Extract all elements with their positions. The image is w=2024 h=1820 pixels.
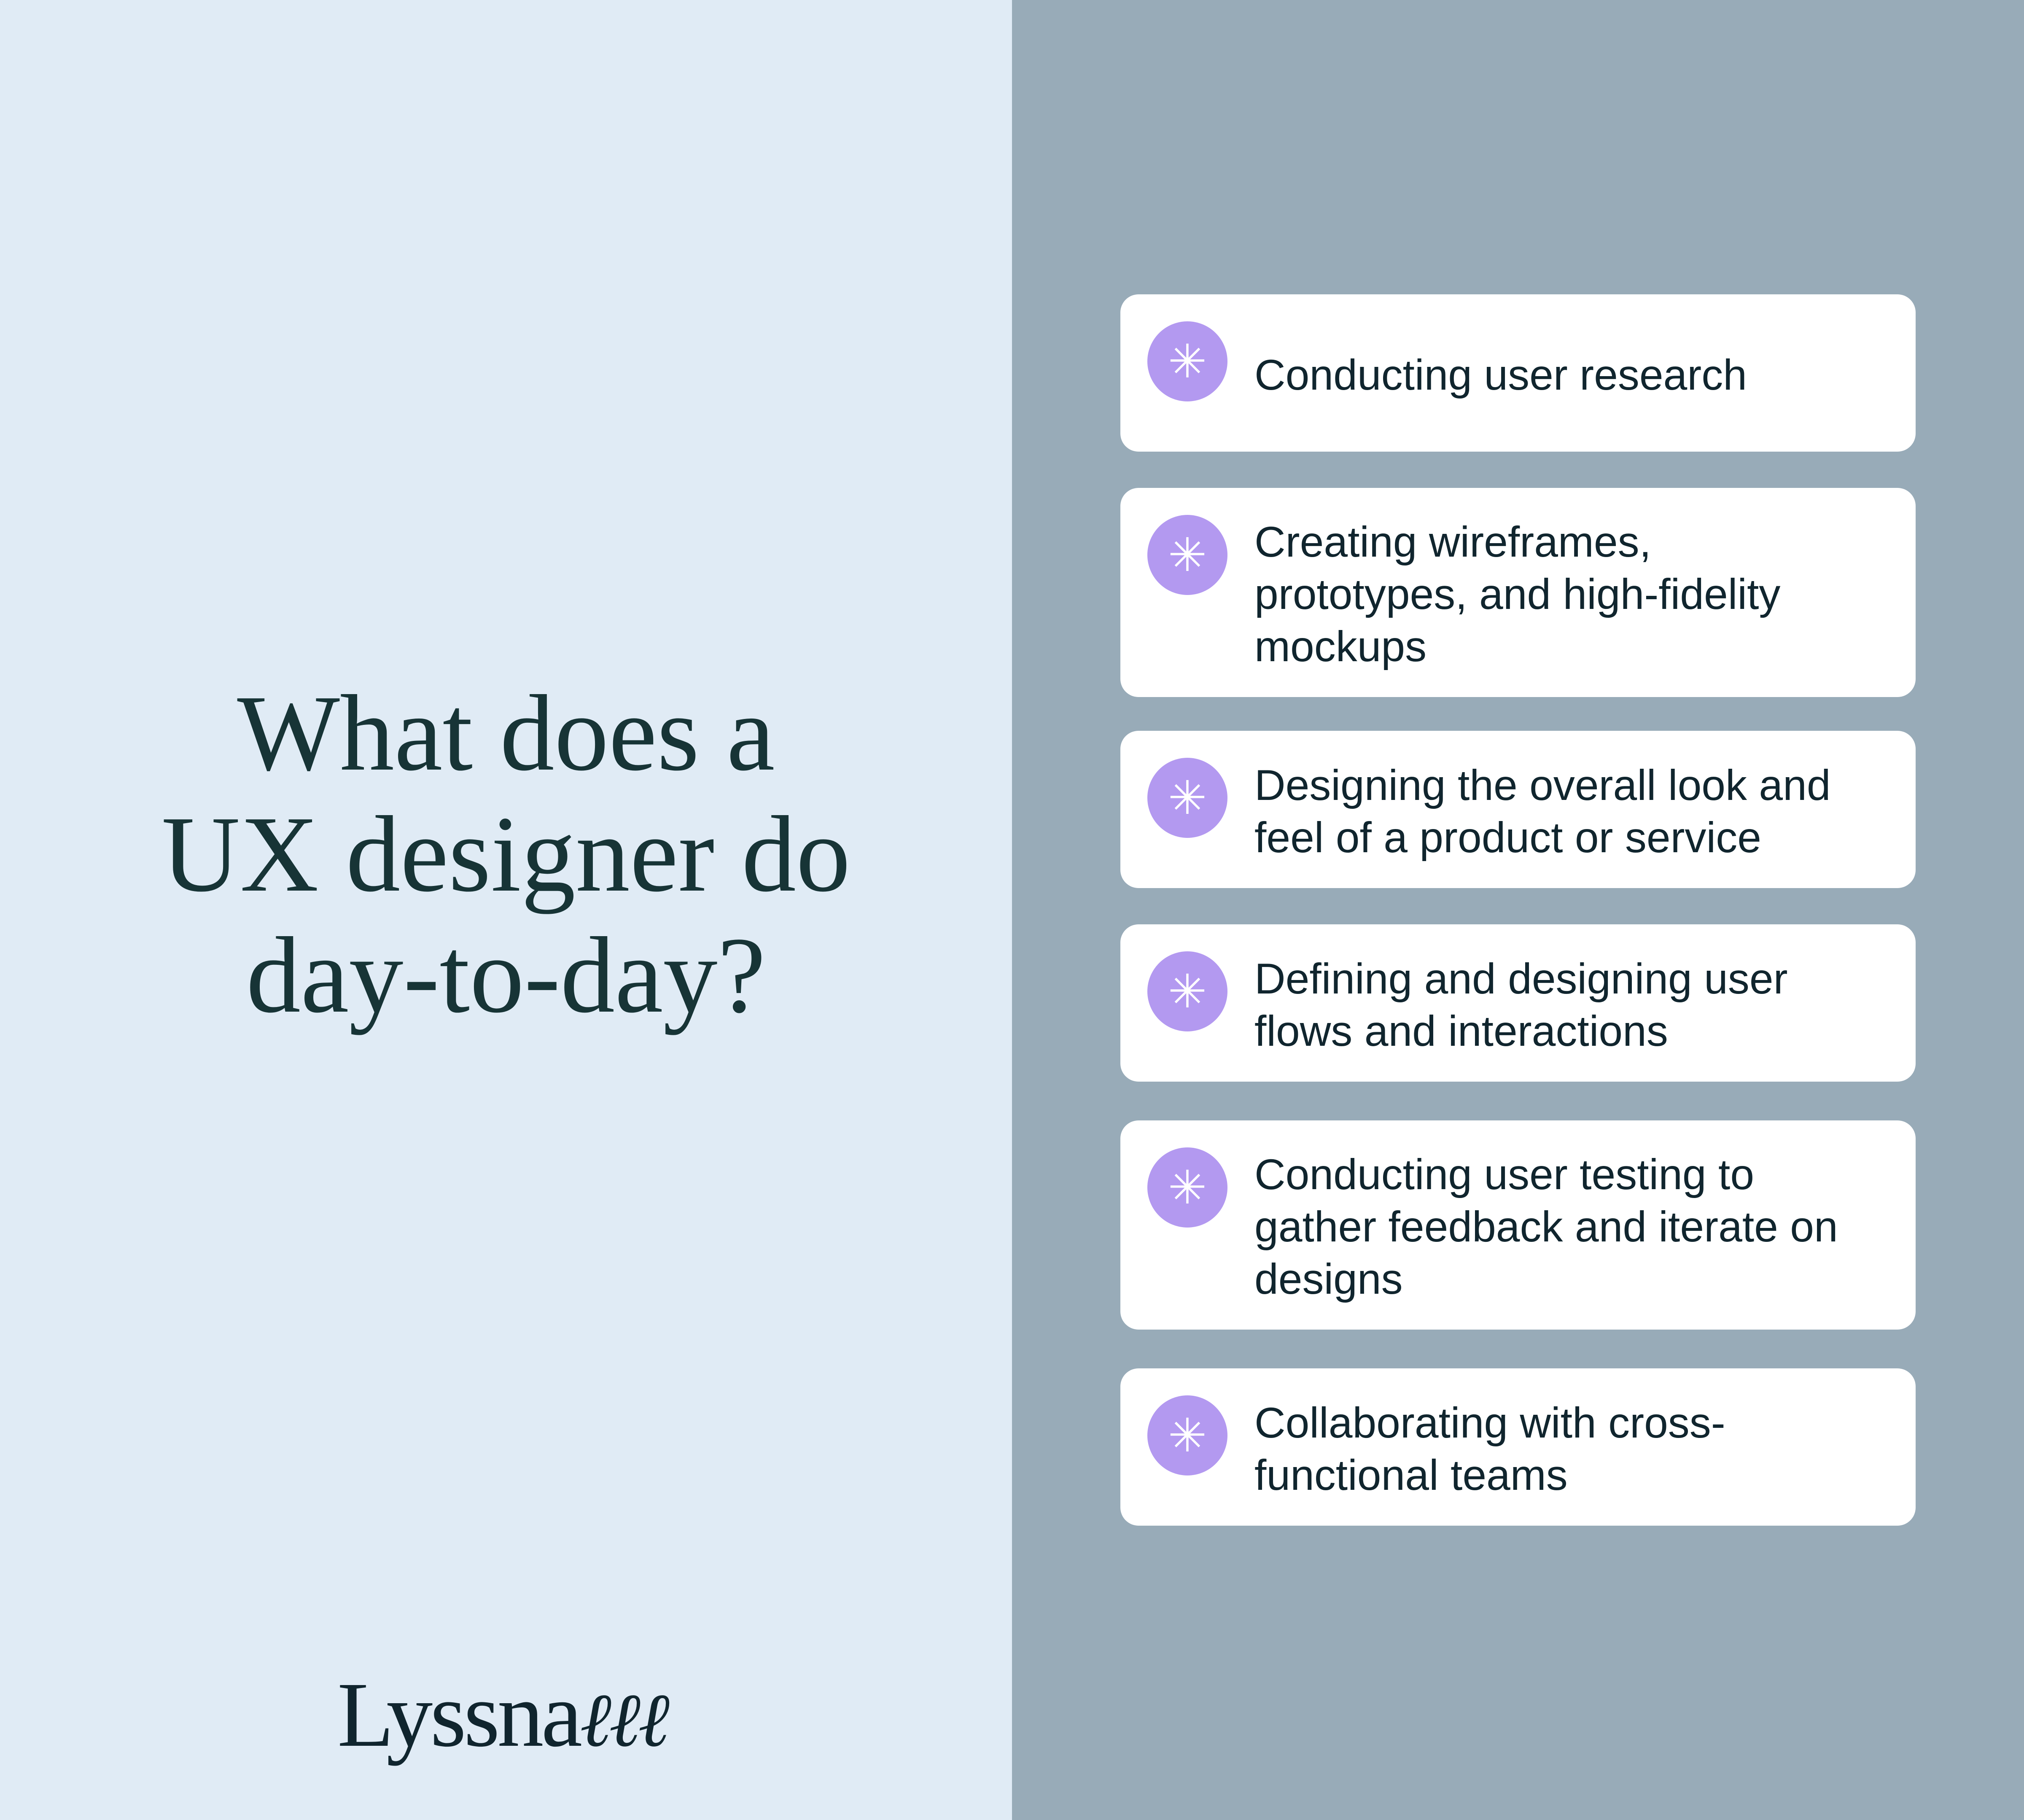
card: user testing [1120,1120,1916,1330]
title: What does a [237,673,775,793]
title [0,673,1012,1036]
text: Conducting user testing to [1254,1150,1754,1198]
title: UX designer do [161,794,851,914]
text: flows and interactions [1254,1007,1668,1055]
card: user flows [1120,924,1916,1082]
card: collaborating [1120,1368,1916,1526]
text [1254,1148,1838,1305]
icon: asterisk: ✳ [1168,964,1207,1018]
text: mockups [1254,622,1426,670]
text: Defining and designing user [1254,955,1788,1003]
text: Creating wireframes, [1254,518,1651,566]
text [1254,952,1788,1057]
text [1254,516,1780,673]
icon: asterisk: ✳ [1168,334,1207,388]
card: user research [1120,294,1916,452]
icon: asterisk: ✳ [1168,528,1207,582]
text: Designing the overall look and [1254,761,1831,809]
panel: left background [0,0,1012,1820]
card: look and feel [1120,731,1916,888]
text: feel of a product or service [1254,813,1761,861]
text: Conducting user research [1254,351,1747,399]
icon: asterisk [1147,321,1227,401]
icon: asterisk: ✳ [1168,771,1207,825]
text: Collaborating with cross- [1254,1398,1725,1446]
text: prototypes, and high-fidelity [1254,570,1780,618]
icon: asterisk [1147,515,1227,595]
text: designs [1254,1255,1403,1303]
text: functional teams [1254,1451,1568,1499]
title: day-to-day? [246,915,766,1035]
icon: asterisk [1147,1395,1227,1475]
icon: asterisk [1147,758,1227,838]
icon: asterisk: ✳ [1168,1408,1207,1462]
text [1254,759,1831,864]
icon: asterisk [1147,951,1227,1031]
text [1254,1397,1725,1501]
icon: asterisk: ✳ [1168,1160,1207,1214]
text: gather feedback and iterate on [1254,1203,1838,1251]
logo: Lyssna: Lyssnaℓℓℓ [337,1663,667,1766]
card: wireframes [1120,488,1916,697]
icon: asterisk [1147,1147,1227,1228]
